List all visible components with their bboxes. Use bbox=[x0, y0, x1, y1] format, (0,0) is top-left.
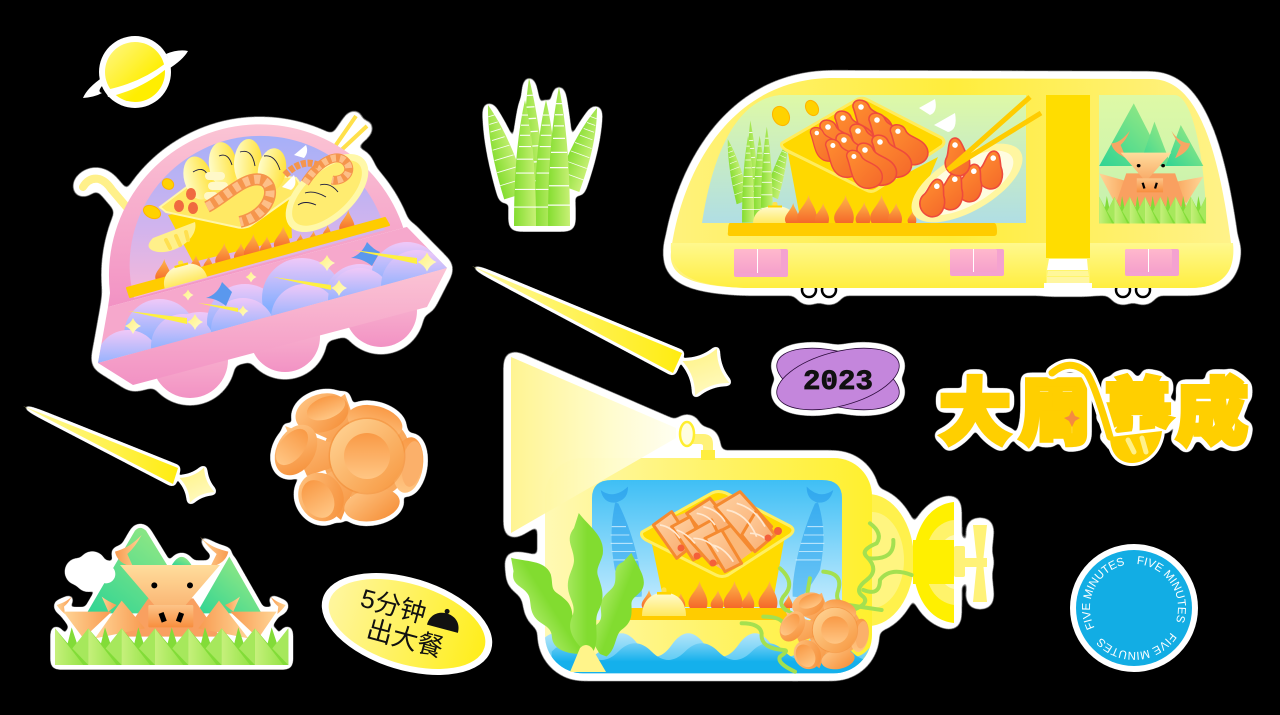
left claws bbox=[57, 597, 117, 638]
shell dark lines bbox=[193, 151, 280, 174]
sticker: 5分钟出大餐 bbox=[309, 554, 505, 694]
periscope pipe bbox=[690, 434, 715, 460]
title ladle bbox=[1052, 365, 1162, 463]
train wheels bbox=[802, 283, 1150, 297]
circular text: FIVE MINUTES FIVE MINUTES FIVE MINUTES bbox=[1082, 556, 1186, 660]
tail sphere bbox=[822, 494, 914, 626]
sticker: yellow train bbox=[671, 78, 1233, 297]
chilli and spice bbox=[678, 527, 782, 566]
seaweed left bbox=[501, 544, 595, 664]
cloche bbox=[159, 255, 207, 289]
plate food bbox=[298, 158, 349, 205]
small comets bbox=[128, 250, 417, 324]
light beam bbox=[511, 357, 676, 533]
shrimp top bbox=[285, 163, 320, 175]
sub pot body bbox=[650, 535, 785, 607]
train chopsticks bbox=[948, 97, 1041, 170]
pink seat middle bbox=[950, 249, 1004, 276]
nostrils bbox=[159, 612, 184, 623]
slogan line two: 出大餐 bbox=[363, 614, 447, 663]
comet star bbox=[671, 337, 741, 407]
badge: 2023 bbox=[770, 337, 906, 421]
saucer wheels bbox=[152, 275, 417, 398]
fish left bbox=[601, 487, 642, 597]
small stars bbox=[125, 252, 436, 334]
sub shelf bbox=[622, 608, 790, 620]
flames in train bbox=[785, 195, 916, 223]
title: 大周养成: 大周养成 bbox=[939, 374, 1248, 454]
planet ring bbox=[83, 50, 188, 98]
sticker: ringed planet bbox=[83, 36, 188, 108]
chilli peppers bbox=[174, 188, 198, 214]
train pot tray bbox=[782, 98, 944, 192]
fish right bbox=[793, 487, 833, 597]
white shell meat bbox=[204, 172, 228, 200]
sea window bbox=[592, 480, 842, 620]
blue fins bbox=[206, 242, 380, 306]
tail cap bbox=[913, 502, 954, 623]
wiggly kelp bbox=[742, 523, 912, 672]
saucer shelf bbox=[127, 218, 389, 297]
bull scene in right window bbox=[1099, 103, 1206, 223]
sub pot tray bbox=[642, 492, 793, 576]
pot body bbox=[168, 190, 292, 262]
hull bbox=[545, 458, 872, 673]
seaweed centre bbox=[568, 513, 603, 652]
orange ball on hull bbox=[774, 589, 871, 674]
mountains bbox=[87, 528, 262, 613]
right window bbox=[1099, 95, 1206, 223]
propeller bbox=[954, 525, 987, 602]
oyster shells bbox=[179, 139, 290, 203]
sticker: orange ball bbox=[266, 387, 427, 530]
icon: cloche bbox=[427, 605, 463, 633]
pink seat right bbox=[1125, 249, 1179, 276]
door steps bbox=[1044, 258, 1092, 289]
saucer dome bbox=[108, 124, 407, 307]
ladle handle bbox=[83, 179, 153, 238]
corn and garlic bbox=[769, 98, 956, 132]
right horn bbox=[200, 537, 228, 567]
flames under pot bbox=[155, 210, 355, 281]
comet upper bbox=[472, 266, 741, 407]
sticker: bamboo shoots bbox=[476, 77, 608, 226]
train door bbox=[1046, 95, 1090, 258]
pot tray bbox=[160, 168, 300, 228]
clouds bbox=[91, 238, 453, 373]
rock bbox=[570, 645, 606, 672]
sticker: flying saucer with food bbox=[83, 116, 453, 398]
oval plate bbox=[272, 139, 382, 247]
lower body band bbox=[671, 243, 1233, 288]
chopsticks bbox=[320, 116, 367, 170]
year text: 2023 bbox=[803, 367, 873, 398]
cloche in train bbox=[753, 202, 797, 224]
train pot body bbox=[788, 153, 938, 223]
dome interior bbox=[130, 136, 385, 298]
shrimp in pot bbox=[207, 179, 270, 222]
sticker: bull in grass bbox=[55, 528, 288, 665]
snout bbox=[148, 605, 193, 627]
ladle highlights bbox=[1128, 438, 1146, 452]
eyes bbox=[151, 582, 193, 588]
sub: periscope and hull sticker bbox=[501, 357, 987, 677]
slogan line one: 5分钟 bbox=[357, 583, 429, 629]
grass bbox=[55, 627, 288, 665]
saucer lower hull bbox=[98, 268, 447, 385]
bull body bbox=[95, 598, 248, 638]
saucer upper deck bbox=[98, 227, 447, 363]
waves bbox=[538, 633, 885, 677]
left horn bbox=[115, 535, 142, 567]
chicken wings in tray bbox=[810, 100, 928, 188]
bamboo in window bbox=[721, 120, 794, 223]
sub flames bbox=[642, 581, 793, 608]
comet star bbox=[172, 460, 222, 510]
comet lower bbox=[23, 406, 222, 510]
white garlic slices bbox=[282, 145, 307, 190]
corn pieces bbox=[141, 176, 176, 221]
bull head bbox=[120, 565, 220, 623]
title orange star accent bbox=[1064, 410, 1080, 427]
seaweed right bbox=[584, 549, 653, 660]
sub cloche bbox=[642, 587, 686, 616]
train body bbox=[671, 78, 1232, 288]
ladle bowl bbox=[149, 222, 195, 252]
badge: FIVE MINUTES bbox=[1070, 544, 1198, 672]
periscope lens bbox=[680, 422, 694, 446]
pink seat left bbox=[734, 249, 788, 277]
train oval plate bbox=[899, 128, 1035, 238]
wings on plate bbox=[917, 136, 1006, 219]
sliced meat bbox=[653, 492, 775, 572]
left window bbox=[702, 95, 1026, 223]
cloud bbox=[69, 556, 115, 588]
train shelf bbox=[728, 223, 997, 236]
right claws bbox=[225, 597, 286, 638]
